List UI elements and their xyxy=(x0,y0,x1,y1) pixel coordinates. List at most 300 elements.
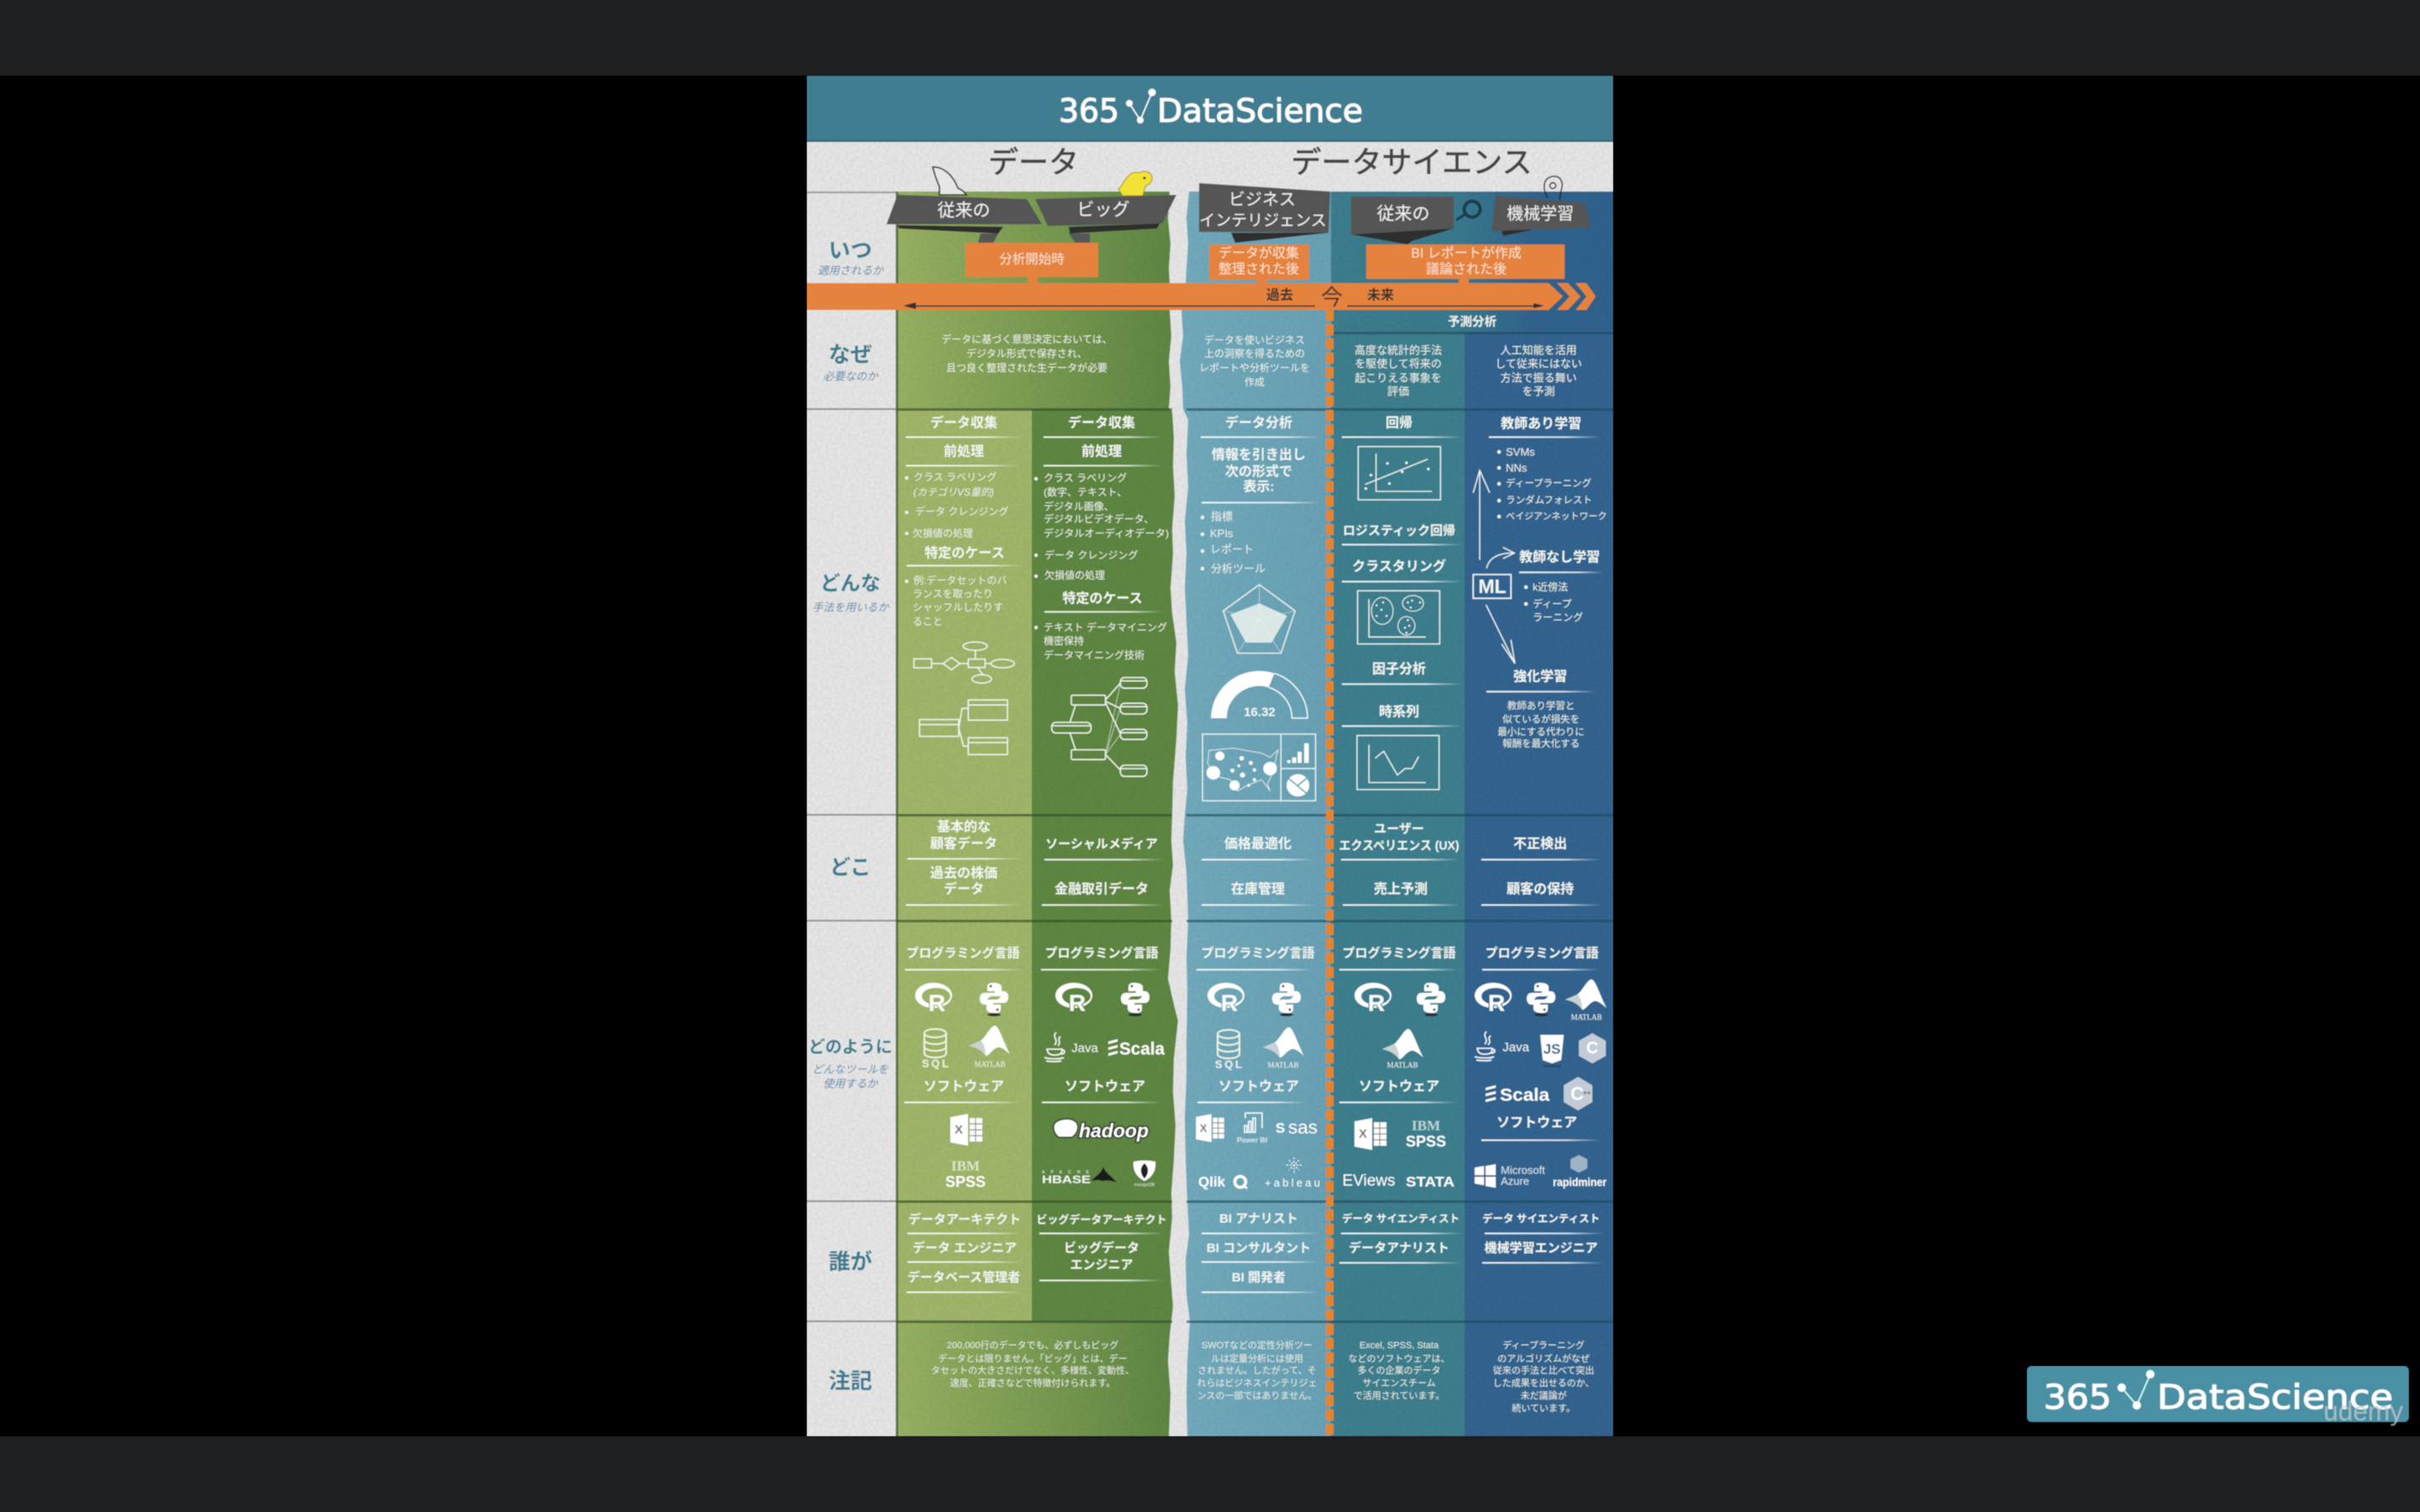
icon: MATLAB xyxy=(969,1026,1010,1068)
label: when: いつ xyxy=(829,238,872,263)
heading: data collection: データ収集 xyxy=(930,415,997,430)
icon: Excel: X xyxy=(955,1122,963,1137)
heading: data science: データサイエンス xyxy=(1292,144,1532,180)
why: traditional DS xyxy=(1355,344,1442,398)
icon: SQL xyxy=(922,1029,949,1070)
past arrow xyxy=(903,302,1315,309)
icon: Excel xyxy=(950,1114,982,1146)
who: traditional data: データ エンジニア xyxy=(913,1240,1017,1255)
where: big data: 金融取引データ xyxy=(1055,880,1149,897)
sublabel: when: 適用されるか xyxy=(818,264,884,277)
bullets: supervised: ディープラーニング xyxy=(1506,477,1592,489)
note: ML: 続いています。 xyxy=(1512,1402,1576,1414)
icon: R: R xyxy=(1221,990,1238,1016)
heading: software: ソフトウェア xyxy=(1218,1079,1299,1094)
diagram: distributed database xyxy=(1052,678,1147,776)
heading: programming languages: プログラミング言語 xyxy=(906,946,1020,961)
who: BI: BI コンサルタント xyxy=(1207,1242,1311,1255)
sublabel: what: 手法を用いるか xyxy=(812,601,889,613)
heading: extract and present: 次の形式で xyxy=(1225,464,1292,479)
note: ML: 未だ議論が xyxy=(1521,1389,1566,1401)
row: how, machine learning tools xyxy=(1475,946,1607,1189)
icon: Scala: Scala xyxy=(1500,1085,1549,1105)
icon: mongoDB xyxy=(1134,1161,1155,1188)
icon: Excel: X xyxy=(1359,1127,1367,1141)
icon: RapidMiner xyxy=(1553,1155,1607,1189)
text: reinforcement description: 教師あり学習と xyxy=(1507,700,1575,711)
note: traditional DS: 多くの企業のデータ xyxy=(1358,1364,1440,1376)
bullet: example: ランスを取ったり xyxy=(913,588,993,600)
chart: dashboard map xyxy=(1202,734,1316,801)
where: traditional DS: ユーザー xyxy=(1374,822,1424,837)
icon: Qlik: Qlik xyxy=(1198,1174,1226,1189)
teal traditional data science column background xyxy=(1331,333,1465,1436)
icon: Qlik xyxy=(1198,1174,1247,1189)
label: what: どんな xyxy=(820,573,881,595)
heading: clustering: クラスタリング xyxy=(1352,558,1446,575)
bullet: example: ること xyxy=(913,616,943,627)
bullets: preprocessing: データ クレンジング xyxy=(1044,549,1138,561)
note: data: 200,000行のデータでも、必ずしもビッグ xyxy=(947,1339,1118,1351)
why: BI: レポートや分析ツールを xyxy=(1199,362,1310,374)
icon: SQL: SQL xyxy=(1215,1058,1242,1070)
heading: software: ソフトウェア xyxy=(1065,1079,1145,1094)
icon: C++: C xyxy=(1570,1084,1584,1104)
who: traditional DS xyxy=(1339,1212,1463,1263)
icon: Stata: STATA xyxy=(1406,1174,1455,1189)
row: where xyxy=(906,820,1602,906)
label: past: 過去 xyxy=(1266,287,1293,302)
orange callout: after BI reports: BI レポートが作成 xyxy=(1411,245,1522,260)
icon: C++ xyxy=(1564,1077,1592,1110)
row separators xyxy=(807,192,1613,1436)
label: notes: 注記 xyxy=(829,1368,872,1394)
where: traditional data: 顧客データ xyxy=(930,835,997,852)
timeline arrow xyxy=(807,283,1596,310)
panel: what, traditional data xyxy=(905,415,1024,754)
icon: Java xyxy=(1475,1032,1529,1061)
heading: extract and present xyxy=(1212,447,1306,494)
icon: hadoop: hadoop xyxy=(1079,1120,1149,1142)
icon: R xyxy=(1207,983,1244,1016)
icon: R xyxy=(915,983,952,1016)
corner logo badge xyxy=(2027,1366,2409,1426)
text: reinforcement description xyxy=(1497,700,1585,749)
logo text 365: 365 xyxy=(1059,92,1119,129)
row: how, traditional data science tools xyxy=(1339,946,1460,1189)
dashed now divider xyxy=(1326,310,1334,1436)
bullets: preprocessing: 欠損値の処理 xyxy=(1044,569,1105,581)
bullet: example: シャッフルしたりす xyxy=(913,601,1003,613)
bullets: outputs xyxy=(1201,511,1265,575)
icon: SAS: S xyxy=(1276,1121,1285,1136)
bullets: preprocessing: クラス ラベリング xyxy=(913,471,997,483)
icon: MATLAB: MATLAB xyxy=(974,1060,1006,1068)
note: ML: 従来の手法と比べて突出 xyxy=(1493,1364,1594,1376)
banner: business intelligence: インテリジェンス xyxy=(1199,212,1327,230)
note: BI: ンスの一部ではありません。 xyxy=(1197,1390,1317,1401)
bullet: text mining: データマイニング技術 xyxy=(1044,648,1144,661)
heading: data: データ xyxy=(988,144,1079,180)
heading: preprocessing: 前処理 xyxy=(1081,444,1122,459)
why: ML: を予測 xyxy=(1522,385,1555,398)
chart: regression scatter xyxy=(1358,447,1440,500)
icon: Apache HBase: APACHE xyxy=(1042,1170,1090,1175)
who: traditional data: データアーキテクト xyxy=(908,1211,1021,1226)
icon: Java: Java xyxy=(1502,1040,1529,1055)
icon: C: C xyxy=(1586,1039,1598,1058)
orange callout: at analysis start xyxy=(965,243,1098,284)
who: traditional data: データベース管理者 xyxy=(908,1270,1020,1285)
heading: software: ソフトウェア xyxy=(1359,1079,1439,1094)
row: how, traditional data tools xyxy=(904,946,1023,1190)
who: ML xyxy=(1482,1212,1604,1263)
icon: RapidMiner: rapidminer xyxy=(1553,1175,1607,1189)
row: how, big data tools xyxy=(1041,946,1165,1188)
why row text xyxy=(941,333,1582,398)
chart: time series xyxy=(1357,736,1439,790)
icon: MATLAB xyxy=(1382,1029,1423,1069)
sublabel: why: 必要なのか xyxy=(823,370,878,383)
where: BI: 在庫管理 xyxy=(1231,880,1285,897)
where: traditional data: 基本的な xyxy=(937,820,991,835)
icon: R xyxy=(1475,983,1512,1016)
text: reinforcement description: 最小にする代わりに xyxy=(1497,727,1585,738)
ML box label: ML xyxy=(1478,575,1507,597)
note: traditional DS: で活用されています。 xyxy=(1354,1390,1444,1401)
note: data xyxy=(931,1339,1134,1389)
bullets: preprocessing: デジタル画像、 xyxy=(1044,500,1114,512)
bullets: preprocessing xyxy=(905,471,1008,539)
heading: data analysis: データ分析 xyxy=(1225,415,1292,430)
banner: machine learning xyxy=(1491,196,1591,236)
who: BI xyxy=(1202,1211,1319,1293)
note: BI xyxy=(1197,1339,1318,1401)
bullets: preprocessing: (カテゴリVS量的) xyxy=(913,486,994,498)
who: ML: データ サイエンティスト xyxy=(1482,1212,1600,1225)
where: traditional DS: エクスペリエンス (UX) xyxy=(1339,838,1459,853)
bottom letterbox bar xyxy=(0,1436,2420,1512)
icon: Excel: X xyxy=(1200,1122,1207,1134)
diagram: ML arrows xyxy=(1473,470,1515,664)
bullets: supervised: ランダムフォレスト xyxy=(1506,494,1592,506)
text: reinforcement description: 似ているが損失を xyxy=(1502,713,1580,725)
note: ML: した成果を出せるのか、 xyxy=(1493,1378,1594,1389)
label: where: どこ xyxy=(829,856,871,879)
heading: software: ソフトウェア xyxy=(923,1079,1004,1094)
where: big data: ソーシャルメディア xyxy=(1045,837,1158,852)
who: big data: ビッグデータアーキテクト xyxy=(1036,1213,1167,1226)
heading: factor analysis: 因子分析 xyxy=(1372,660,1426,677)
orange callout: at analysis start: 分析開始時 xyxy=(999,252,1065,267)
sublabel: how xyxy=(812,1063,889,1090)
why: BI: 上の洞察を得るための xyxy=(1204,347,1305,360)
header band with logo xyxy=(807,76,1613,142)
why: data: データに基づく意思決定においては、 xyxy=(941,333,1113,345)
heading: programming languages: プログラミング言語 xyxy=(1342,946,1456,961)
icon: yellow elephant xyxy=(1118,171,1152,196)
infographic poster xyxy=(807,76,1613,1436)
icon: Power BI: Power BI xyxy=(1237,1136,1267,1144)
heading: software: ソフトウェア xyxy=(1497,1116,1577,1131)
icon: MATLAB: MATLAB xyxy=(1386,1061,1418,1069)
left row labels xyxy=(808,238,892,1394)
icon: Excel xyxy=(1355,1118,1386,1150)
bullet: text mining: 機密保持 xyxy=(1044,634,1084,647)
who: traditional DS: データアナリスト xyxy=(1349,1240,1449,1255)
where: ML: 不正検出 xyxy=(1513,835,1567,852)
heading: unsupervised learning: 教師なし学習 xyxy=(1519,549,1600,564)
why: data: デジタル形式で保存され、 xyxy=(966,347,1087,360)
why: BI xyxy=(1199,333,1310,388)
note: BI: SWOTなどの定性分析ツー xyxy=(1202,1339,1313,1351)
icon: JavaScript: JavaScript xyxy=(1543,1063,1561,1068)
who: BI: BI 開発者 xyxy=(1232,1270,1286,1285)
logo text DataScience: DataScience xyxy=(1157,92,1363,129)
note: data: タセットの大きさだけでなく、多様性、変動性、 xyxy=(931,1364,1134,1376)
heading: specific cases: 特定のケース xyxy=(1062,590,1143,606)
icon: Java xyxy=(1044,1032,1098,1062)
why: traditional DS: 高度な統計的手法 xyxy=(1355,344,1442,356)
heading: data collection: データ収集 xyxy=(1068,415,1135,430)
icon: IBM SPSS: SPSS xyxy=(945,1173,986,1190)
diagram: table schema xyxy=(919,700,1007,754)
bullets: outputs: レポート xyxy=(1210,543,1254,556)
icon: R: R xyxy=(1069,990,1086,1016)
why: data: 且つ良く整理された生データが必要 xyxy=(946,361,1107,374)
heading: logistic regression: ロジスティック回帰 xyxy=(1343,524,1455,538)
heading: extract and present: 情報を引き出し xyxy=(1212,447,1306,462)
icon: SQL: SQL xyxy=(922,1057,949,1070)
where: ML: 顧客の保持 xyxy=(1507,882,1574,897)
icon: SAS xyxy=(1276,1117,1318,1137)
icon: Python xyxy=(980,983,1008,1016)
heading: preprocessing: 前処理 xyxy=(944,444,984,459)
where: big data xyxy=(1042,837,1164,906)
note: ML: のアルゴリズムがなぜ xyxy=(1497,1352,1590,1364)
why: BI: データを使いビジネス xyxy=(1204,333,1305,346)
who: big data: ビッグデータ xyxy=(1064,1240,1139,1255)
heading: programming languages: プログラミング言語 xyxy=(1044,946,1159,961)
note: traditional DS: Excel, SPSS, Stata xyxy=(1360,1341,1439,1351)
icon: JavaScript: JS xyxy=(1544,1042,1560,1057)
who: big data: エンジニア xyxy=(1070,1258,1134,1272)
banner: business intelligence: ビジネス xyxy=(1228,190,1296,209)
badge text DataScience: DataScience xyxy=(2157,1378,2393,1417)
bullet: example: 例:データセットのバ xyxy=(913,574,1007,586)
why: ML xyxy=(1495,344,1582,398)
banner: traditional data science xyxy=(1351,197,1454,244)
where: traditional data: データ xyxy=(944,880,984,897)
label: why: なぜ xyxy=(829,342,872,367)
where: traditional data: 過去の株価 xyxy=(930,865,997,880)
bullets: preprocessing xyxy=(1034,472,1169,581)
banner: traditional data xyxy=(886,195,1042,243)
bullets: preprocessing: データ クレンジング xyxy=(915,505,1008,517)
icon: IBM SPSS: SPSS xyxy=(1406,1133,1446,1150)
bullet: text mining xyxy=(1034,621,1167,661)
why: ML: して従来にはない xyxy=(1495,358,1582,370)
orange callout: after data collected xyxy=(1209,244,1309,284)
icon: MATLAB: MATLAB xyxy=(1267,1061,1299,1069)
icon: C xyxy=(1579,1033,1606,1063)
chart: gauge xyxy=(1211,671,1307,718)
icon: tableau: +ableau xyxy=(1265,1176,1320,1189)
icon: R: R xyxy=(1368,990,1385,1016)
chart: radar xyxy=(1223,585,1295,654)
orange callout: after BI reports: 議論された後 xyxy=(1426,262,1507,277)
icon: Microsoft Azure xyxy=(1475,1164,1545,1188)
banner: traditional data: 従来の xyxy=(938,202,990,220)
icon: SAS: sas xyxy=(1288,1117,1318,1137)
why: traditional DS: 起こりえる事象を xyxy=(1355,371,1442,385)
bullets: unsupervised xyxy=(1524,581,1583,623)
why: BI: 作成 xyxy=(1244,376,1265,388)
panel: what, business intelligence xyxy=(1201,415,1321,801)
where: traditional DS: 売上予測 xyxy=(1374,882,1428,897)
icon: mongoDB: mongoDB xyxy=(1134,1183,1155,1188)
bullet: text mining: テキスト データマイニング xyxy=(1044,621,1167,633)
who: ML: 機械学習エンジニア xyxy=(1484,1240,1598,1255)
poster paper background xyxy=(807,141,1613,1436)
icon: R xyxy=(1355,983,1392,1016)
icon: Power BI xyxy=(1237,1113,1267,1144)
icon: dolphin xyxy=(933,167,966,195)
why: data xyxy=(941,333,1113,374)
icon: JavaScript xyxy=(1540,1035,1564,1068)
icon: Python xyxy=(1527,983,1555,1016)
icon: Microsoft Azure: Azure xyxy=(1501,1174,1529,1188)
why: traditional DS: を駆使して将来の xyxy=(1355,358,1442,370)
bullets: outputs: KPIs xyxy=(1210,528,1234,539)
panel: what, machine learning xyxy=(1473,415,1607,749)
note: ML: ディープラーニング xyxy=(1502,1339,1585,1351)
icon: Excel xyxy=(1196,1114,1224,1142)
banner: traditional data science: 従来の xyxy=(1376,205,1430,223)
orange callout: after data collected: 整理された後 xyxy=(1218,262,1299,277)
sublabel: how: どんなツールを xyxy=(812,1063,889,1075)
icon: MATLAB xyxy=(1263,1027,1304,1069)
bullets: supervised: NNs xyxy=(1506,462,1528,474)
green data column backgrounds xyxy=(897,192,1183,1436)
icon: Python xyxy=(1417,983,1445,1016)
light blue business intelligence column background xyxy=(1176,192,1336,1436)
bullets: preprocessing: デジタルビデオデータ、 xyxy=(1044,512,1154,525)
panel: what, traditional data science xyxy=(1342,415,1463,790)
panel: what, big data xyxy=(1034,415,1169,776)
bullets: preprocessing: (数字、テキスト、 xyxy=(1044,486,1127,498)
note: BI: れらはビジネスインテリジェ xyxy=(1197,1378,1318,1389)
who: big data xyxy=(1036,1213,1167,1281)
why: traditional DS: 評価 xyxy=(1387,385,1409,398)
icon: Python xyxy=(1121,983,1150,1016)
gauge value: 16.32 xyxy=(1244,706,1276,719)
bullets: unsupervised: ラーニング xyxy=(1533,612,1583,623)
heading: specific cases: 特定のケース xyxy=(924,544,1005,561)
icon: Apache HBase xyxy=(1042,1167,1117,1186)
label: who: 誰が xyxy=(829,1249,872,1274)
navy machine learning column background xyxy=(1465,333,1613,1436)
label: now: 今 xyxy=(1321,285,1343,310)
icon: R: R xyxy=(1488,990,1505,1016)
note: data: 速度、正確さなどで特徴付けられます。 xyxy=(950,1377,1115,1389)
bullets: preprocessing: クラス ラベリング xyxy=(1044,472,1127,484)
where: traditional data xyxy=(906,820,1021,906)
who: traditional data xyxy=(907,1211,1022,1293)
icon: magnifier xyxy=(1456,202,1481,220)
badge text 365: 365 xyxy=(2044,1378,2112,1417)
note: traditional DS: サイエンスチーム xyxy=(1362,1378,1436,1389)
heading: programming languages: プログラミング言語 xyxy=(1485,946,1599,961)
icon: Microsoft Azure: Microsoft xyxy=(1501,1164,1545,1176)
bullets: preprocessing: デジタルオーディオデータ) xyxy=(1044,527,1169,539)
who: BI: BI アナリスト xyxy=(1219,1211,1298,1226)
bullets: supervised xyxy=(1497,445,1607,522)
banner: machine learning: 機械学習 xyxy=(1507,204,1574,223)
icon: IBM SPSS xyxy=(945,1158,986,1190)
icon: Apache HBase: HBASE xyxy=(1042,1173,1091,1186)
badge root symbol xyxy=(2118,1370,2154,1410)
row: who xyxy=(907,1211,1604,1293)
icon: SQL xyxy=(1215,1030,1242,1070)
why: ML: 人工知能を活用 xyxy=(1500,344,1577,356)
icon: R: R xyxy=(929,990,945,1016)
icon: Scala: Scala xyxy=(1119,1040,1165,1058)
predictive analytics label: 予測分析 xyxy=(1448,314,1497,329)
note: traditional DS xyxy=(1348,1341,1450,1401)
sublabel: how: 使用するか xyxy=(823,1077,878,1090)
icon: MATLAB xyxy=(1565,979,1607,1021)
label: future: 未来 xyxy=(1367,287,1394,302)
chart: clustering xyxy=(1358,591,1439,644)
heading: time series: 時系列 xyxy=(1379,704,1419,719)
bullets: unsupervised: ディープ xyxy=(1533,597,1571,610)
row: notes xyxy=(931,1339,1594,1414)
icon: IBM SPSS: IBM xyxy=(951,1158,980,1174)
bullets: supervised: ベイジアンネットワーク xyxy=(1506,511,1607,522)
bullets: outputs: 分析ツール xyxy=(1211,563,1265,575)
heading: extract and present: 表示: xyxy=(1243,479,1275,494)
who: traditional DS: データ サイエンティスト xyxy=(1342,1212,1460,1225)
bullets: supervised: SVMs xyxy=(1506,445,1535,459)
diagram: ER model xyxy=(914,642,1014,683)
banner: business intelligence xyxy=(1199,183,1330,243)
icon: tableau xyxy=(1265,1158,1320,1189)
note: traditional DS: などのソフトウェアは、 xyxy=(1348,1353,1450,1364)
icon: C++: ++ xyxy=(1583,1089,1591,1097)
bullets: outputs: 指標 xyxy=(1211,511,1233,522)
icon: MATLAB: MATLAB xyxy=(1570,1013,1602,1021)
predictive analytics strip background xyxy=(1331,192,1613,333)
row: how, BI tools xyxy=(1196,946,1320,1189)
banner: big data: ビッグ xyxy=(1077,200,1129,220)
bullets: preprocessing: 欠損値の処理 xyxy=(913,527,973,539)
where: BI xyxy=(1202,835,1315,906)
heading: supervised learning: 教師あり学習 xyxy=(1501,415,1581,432)
udemy watermark: udemy xyxy=(2323,1396,2403,1426)
note: data: データとは限りません。「ビッグ」とは、デー xyxy=(938,1352,1128,1364)
icon: IBM SPSS xyxy=(1406,1117,1446,1150)
icon: R xyxy=(1055,983,1092,1016)
heading: regression: 回帰 xyxy=(1386,415,1413,430)
top letterbox bar xyxy=(0,0,2420,76)
logo root symbol xyxy=(1126,89,1156,123)
future arrow xyxy=(1347,303,1544,308)
note: BI: されません。したがって、そ xyxy=(1197,1364,1317,1376)
icon: Python xyxy=(1272,983,1301,1016)
bullet: example xyxy=(905,574,1007,627)
where: traditional DS xyxy=(1339,822,1460,906)
